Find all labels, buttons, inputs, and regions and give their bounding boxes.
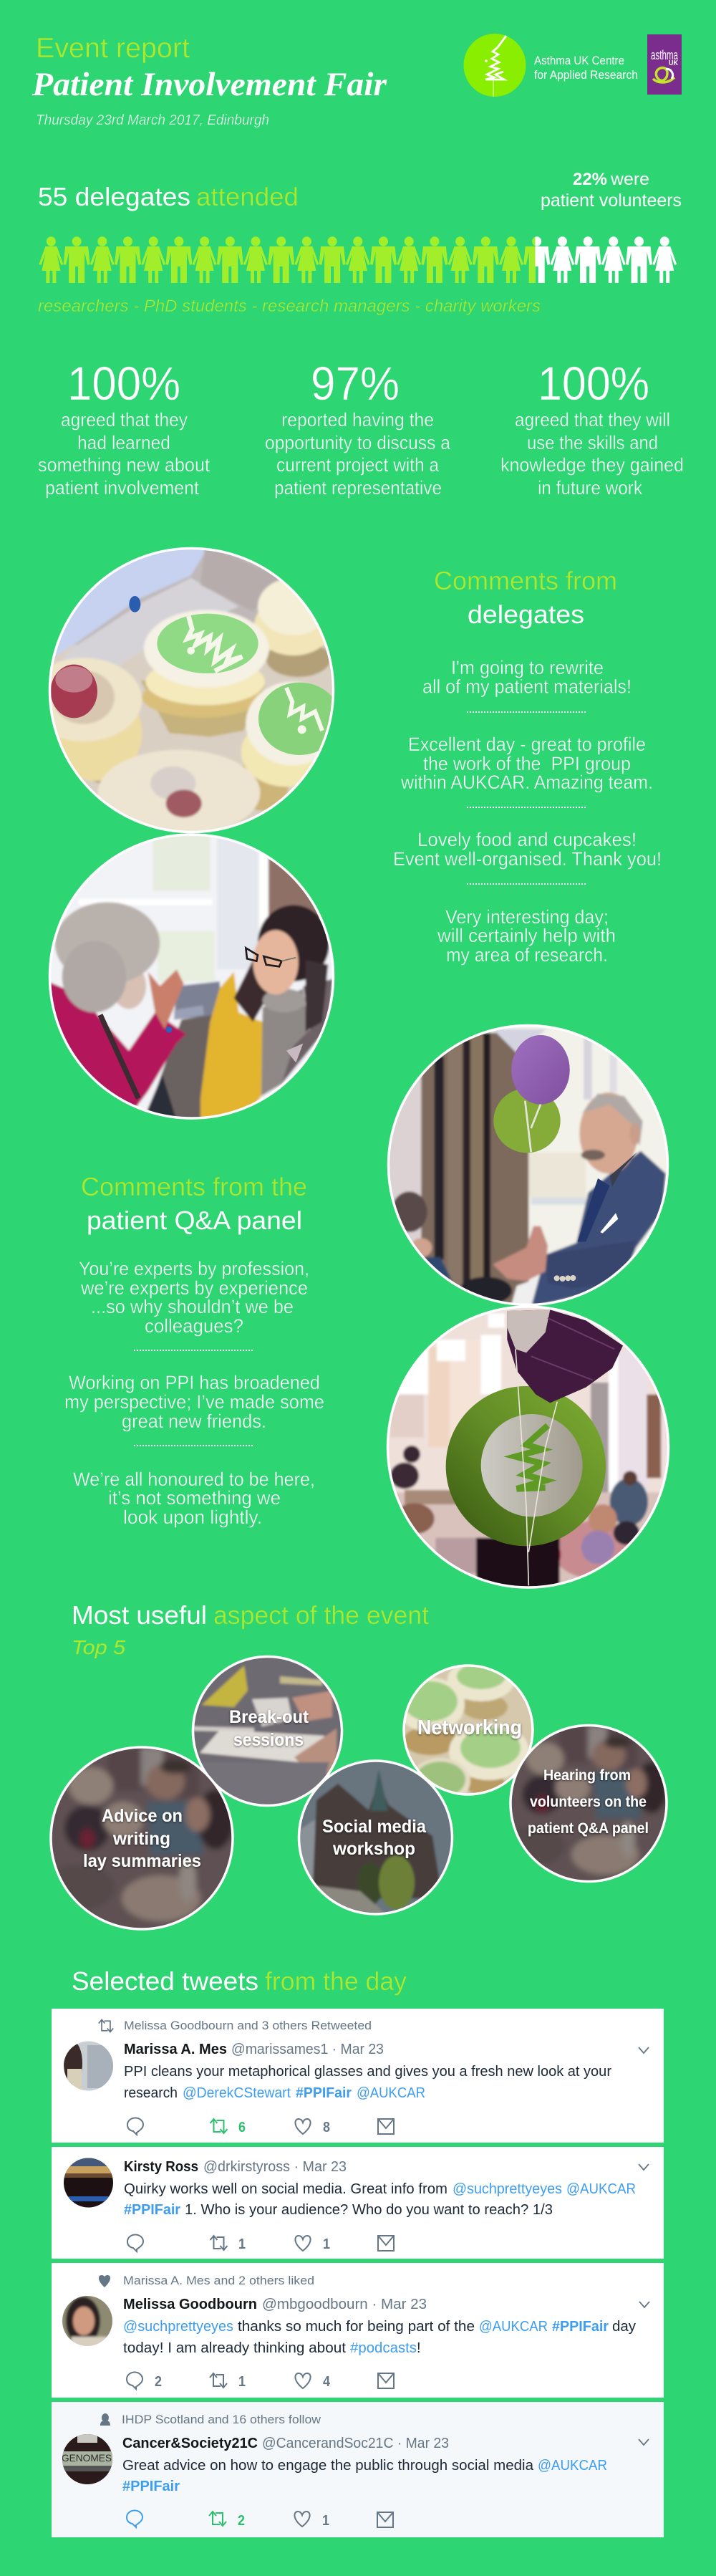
heading: comments from delegates: Comments from [434, 566, 617, 595]
stat: learned something new: agreed that they [61, 409, 188, 431]
callout: patient volunteers: patient volunteers [541, 191, 682, 211]
logo: Asthma UK purple tab [647, 34, 682, 95]
photo: two delegates talking [43, 831, 337, 1125]
tweet: Melissa Goodbourn [52, 2263, 664, 2398]
text block: delegate comments: the work of the PPI group [423, 753, 631, 774]
avatar [62, 2434, 112, 2484]
icon: liked heart [99, 2275, 110, 2287]
text block: patient panel comments: Working on PPI has broadened [69, 1372, 320, 1393]
caption: delegate roles: researchers - PhD students - research managers - charity workers [38, 297, 541, 316]
actions row: 8 [323, 2120, 330, 2135]
tweet: Cancer&Society21C: Great advice on how to engage the public through social media [122, 2458, 534, 2474]
tweet: Melissa Goodbourn: thanks so much for being part of the [238, 2319, 475, 2335]
actions row: 1 [238, 2374, 246, 2390]
actions row [127, 2510, 393, 2529]
stat: learned something new: 100% [67, 357, 180, 410]
tweet: Kirsty Ross: Quirky works well on social media. Great info from [124, 2181, 448, 2197]
title: Patient Involvement Fair: Patient Involvement Fair [32, 66, 387, 103]
actions row: 1 [322, 2513, 329, 2529]
tweet: Kirsty Ross: @drkirstyross · Mar 23 [203, 2159, 347, 2175]
text block: patient panel comments: You’re experts by profession, [79, 1258, 309, 1279]
heading: comments from delegates [434, 566, 617, 629]
text block: delegate comments: within AUKCAR. Amazing team. [400, 772, 653, 793]
date and place: Thursday 23rd March 2017, Edinburgh [36, 112, 269, 128]
stat: will use the skills: in future work [538, 477, 643, 499]
avatar [62, 2296, 112, 2346]
label: writing [112, 1829, 170, 1849]
actions row: 6 [238, 2120, 246, 2135]
text block: delegate comments: all of my patient materials! [422, 676, 632, 698]
tweet: Melissa Goodbourn: #podcasts [350, 2340, 417, 2356]
tweet: Marissa A. Mes: @marissames1 · Mar 23 [231, 2042, 384, 2057]
heading: comments from the patient panel: Comments from the [81, 1172, 307, 1201]
label [528, 1767, 649, 1837]
logo: Asthma UK purple tab: UK [669, 59, 679, 67]
actions row: 2 [155, 2374, 162, 2390]
tweet: Cancer&Society21C: Cancer&Society21C [122, 2436, 258, 2451]
stat: learned something new: had learned [77, 432, 170, 453]
subheading: top 5: Top 5 [72, 1636, 125, 1658]
label [83, 1806, 201, 1871]
text block: patient panel comments: look upon lightly. [123, 1506, 262, 1528]
context line: IHDP Scotland and 16 others follow [122, 2413, 321, 2426]
text block: patient panel comments: great new friends. [122, 1410, 266, 1432]
heading: delegates attended: attended [196, 182, 299, 211]
label: Break-out [229, 1707, 309, 1727]
text block: patient panel comments [64, 1258, 324, 1528]
photo: speaker with balloons [383, 1021, 673, 1307]
logo: Asthma UK purple tab: asthma [651, 48, 679, 62]
callout: patient volunteers: 22% [573, 170, 607, 189]
tweet: Melissa Goodbourn: ! [417, 2340, 421, 2356]
tweet: Melissa Goodbourn: @mbgoodbourn · Mar 23 [262, 2297, 427, 2312]
tweet: Marissa A. Mes: research [124, 2085, 178, 2101]
avatar: GENOMES [62, 2452, 112, 2464]
actions row: 4 [323, 2374, 331, 2390]
tweet: Cancer&Society21C [52, 2402, 664, 2537]
heading: selected tweets: from the day [265, 1966, 407, 1996]
tweet: Kirsty Ross: Kirsty Ross [124, 2159, 198, 2175]
heading: comments from the patient panel [81, 1172, 307, 1235]
label: sessions [233, 1730, 304, 1750]
stat: discussed a current project: reported having the [281, 409, 434, 431]
tweet: Kirsty Ross: #PPIFair [124, 2202, 180, 2218]
stat: will use the skills: use the skills and [527, 432, 658, 453]
stat: learned something new [38, 357, 211, 499]
heading: most useful aspect: Most useful [72, 1600, 207, 1630]
label [229, 1707, 309, 1750]
logo: Asthma UK Centre for Applied Research: Asthma UK Centre [534, 54, 624, 67]
circle: advice on writing lay summaries [49, 1746, 234, 1931]
text block: patient panel comments: my perspective; I’ve made some [64, 1391, 324, 1413]
pictogram: 25 people row [39, 236, 677, 283]
tweet: Marissa A. Mes: @AUKCAR [357, 2085, 425, 2101]
heading: selected tweets: Selected tweets [72, 1966, 258, 1996]
tweet: Melissa Goodbourn: @AUKCAR [479, 2319, 548, 2335]
circle: break-out sessions [192, 1655, 344, 1807]
label: Hearing from [543, 1767, 631, 1784]
text block: patient panel comments: we’re experts by experience [80, 1277, 308, 1299]
stat: discussed a current project: opportunity to discuss a [265, 432, 450, 453]
stat: will use the skills: 100% [538, 357, 649, 410]
actions row: 2 [238, 2513, 245, 2529]
heading: comments from delegates: delegates [468, 600, 584, 629]
circle: social media workshop [298, 1759, 454, 1916]
stat: discussed a current project [265, 357, 450, 499]
circle: hearing from patient volunteers [509, 1724, 668, 1883]
text block: delegate comments: my area of research. [446, 944, 608, 966]
heading: event report: Event report [36, 33, 190, 64]
text block: patient panel comments: it’s not something we [108, 1487, 281, 1509]
logo: Asthma UK Centre for Applied Research: for Applied Research [534, 68, 638, 82]
label: Social media [322, 1817, 427, 1837]
label: patient Q&A panel [528, 1820, 649, 1837]
actions row: 1 [238, 2236, 246, 2252]
text block: delegate comments: Lovely food and cupcakes! [417, 829, 637, 850]
header title block [32, 33, 387, 128]
actions row: 1 [323, 2236, 330, 2252]
icon: follow person [100, 2413, 110, 2426]
actions row [127, 2373, 394, 2390]
tweet: Melissa Goodbourn: today! I am already thinking about [123, 2340, 346, 2356]
stat: will use the skills: agreed that they will [515, 409, 670, 431]
text block: delegate comments: Excellent day - great to profile [408, 734, 646, 755]
tweet: Cancer&Society21C: @CancerandSoc21C · Mar 23 [262, 2436, 449, 2451]
heading: most useful aspect: aspect of the event [213, 1600, 429, 1630]
tweet: Cancer&Society21C: #PPIFair [122, 2479, 180, 2494]
avatar [64, 2158, 113, 2208]
tweet: Marissa A. Mes: @DerekCStewart [183, 2085, 291, 2101]
actions row [127, 2118, 394, 2135]
label: lay summaries [83, 1851, 201, 1871]
tweet: Marissa A. Mes: #PPIFair [296, 2085, 352, 2101]
context line: Melissa Goodbourn and 3 others Retweeted [124, 2019, 372, 2032]
text block: delegate comments: Event well-organised. Thank you! [393, 848, 662, 870]
callout: patient volunteers [541, 170, 682, 211]
label [322, 1817, 427, 1859]
text block: patient panel comments: ...so why shouldn’t we be [91, 1296, 294, 1317]
text block: delegate comments: will certainly help with [437, 925, 616, 946]
tweet: Kirsty Ross: 1. Who is your audience? Who do you want to reach? 1/3 [185, 2202, 553, 2218]
avatar [64, 2042, 113, 2090]
label: workshop [332, 1839, 415, 1859]
stat: discussed a current project: patient representative [274, 477, 442, 499]
tweet: Melissa Goodbourn: day [612, 2319, 636, 2335]
tweet: Melissa Goodbourn: Melissa Goodbourn [123, 2297, 257, 2312]
tweet: Marissa A. Mes [52, 2009, 664, 2143]
heading: selected tweets [72, 1966, 407, 1996]
tweet: Kirsty Ross [52, 2147, 664, 2259]
stat: will use the skills: knowledge they gained [500, 454, 684, 476]
heading: most useful aspect [72, 1600, 429, 1630]
label: volunteers on the [530, 1794, 647, 1810]
stat: discussed a current project: 97% [311, 357, 400, 410]
stat: learned something new: something new about [38, 454, 211, 476]
logo: Asthma UK Centre for Applied Research [464, 34, 638, 97]
text block: delegate comments: Very interesting day; [445, 906, 609, 928]
context line: Marissa A. Mes and 2 others liked [123, 2274, 314, 2287]
stat: learned something new: patient involvement [45, 477, 200, 499]
text block: delegate comments: I'm going to rewrite [451, 657, 604, 678]
tweet: Melissa Goodbourn: @suchprettyeyes [123, 2319, 233, 2335]
text block: patient panel comments: colleagues? [145, 1315, 243, 1337]
circle: networking [402, 1664, 534, 1796]
heading: comments from the patient panel: patient Q&A panel [87, 1206, 302, 1235]
photo: cupcakes [49, 547, 335, 834]
text block: patient panel comments: We’re all honoured to be here, [73, 1469, 315, 1490]
stat: discussed a current project: current project with a [276, 454, 439, 476]
label: Advice on [102, 1806, 183, 1826]
photo: green and purple balloons [383, 1304, 673, 1590]
stat: will use the skills [500, 357, 684, 499]
tweet: Melissa Goodbourn: #PPIFair [552, 2319, 609, 2335]
heading: delegates attended: 55 delegates [38, 182, 190, 211]
tweet: Kirsty Ross: @suchprettyeyes [453, 2181, 562, 2197]
callout: patient volunteers: were [610, 170, 649, 189]
tweet: Marissa A. Mes: PPI cleans your metaphorical glasses and gives you a fresh new look at your [124, 2064, 611, 2080]
tweet: Kirsty Ross: @AUKCAR [566, 2181, 636, 2197]
icon: retweet context [99, 2020, 113, 2032]
label: Networking [417, 1716, 522, 1739]
text block: delegate comments [393, 657, 662, 966]
tweet: Cancer&Society21C: @AUKCAR [538, 2458, 607, 2474]
tweet: Marissa A. Mes: Marissa A. Mes [124, 2042, 227, 2057]
actions row [127, 2235, 394, 2252]
heading: delegates attended [38, 182, 299, 211]
